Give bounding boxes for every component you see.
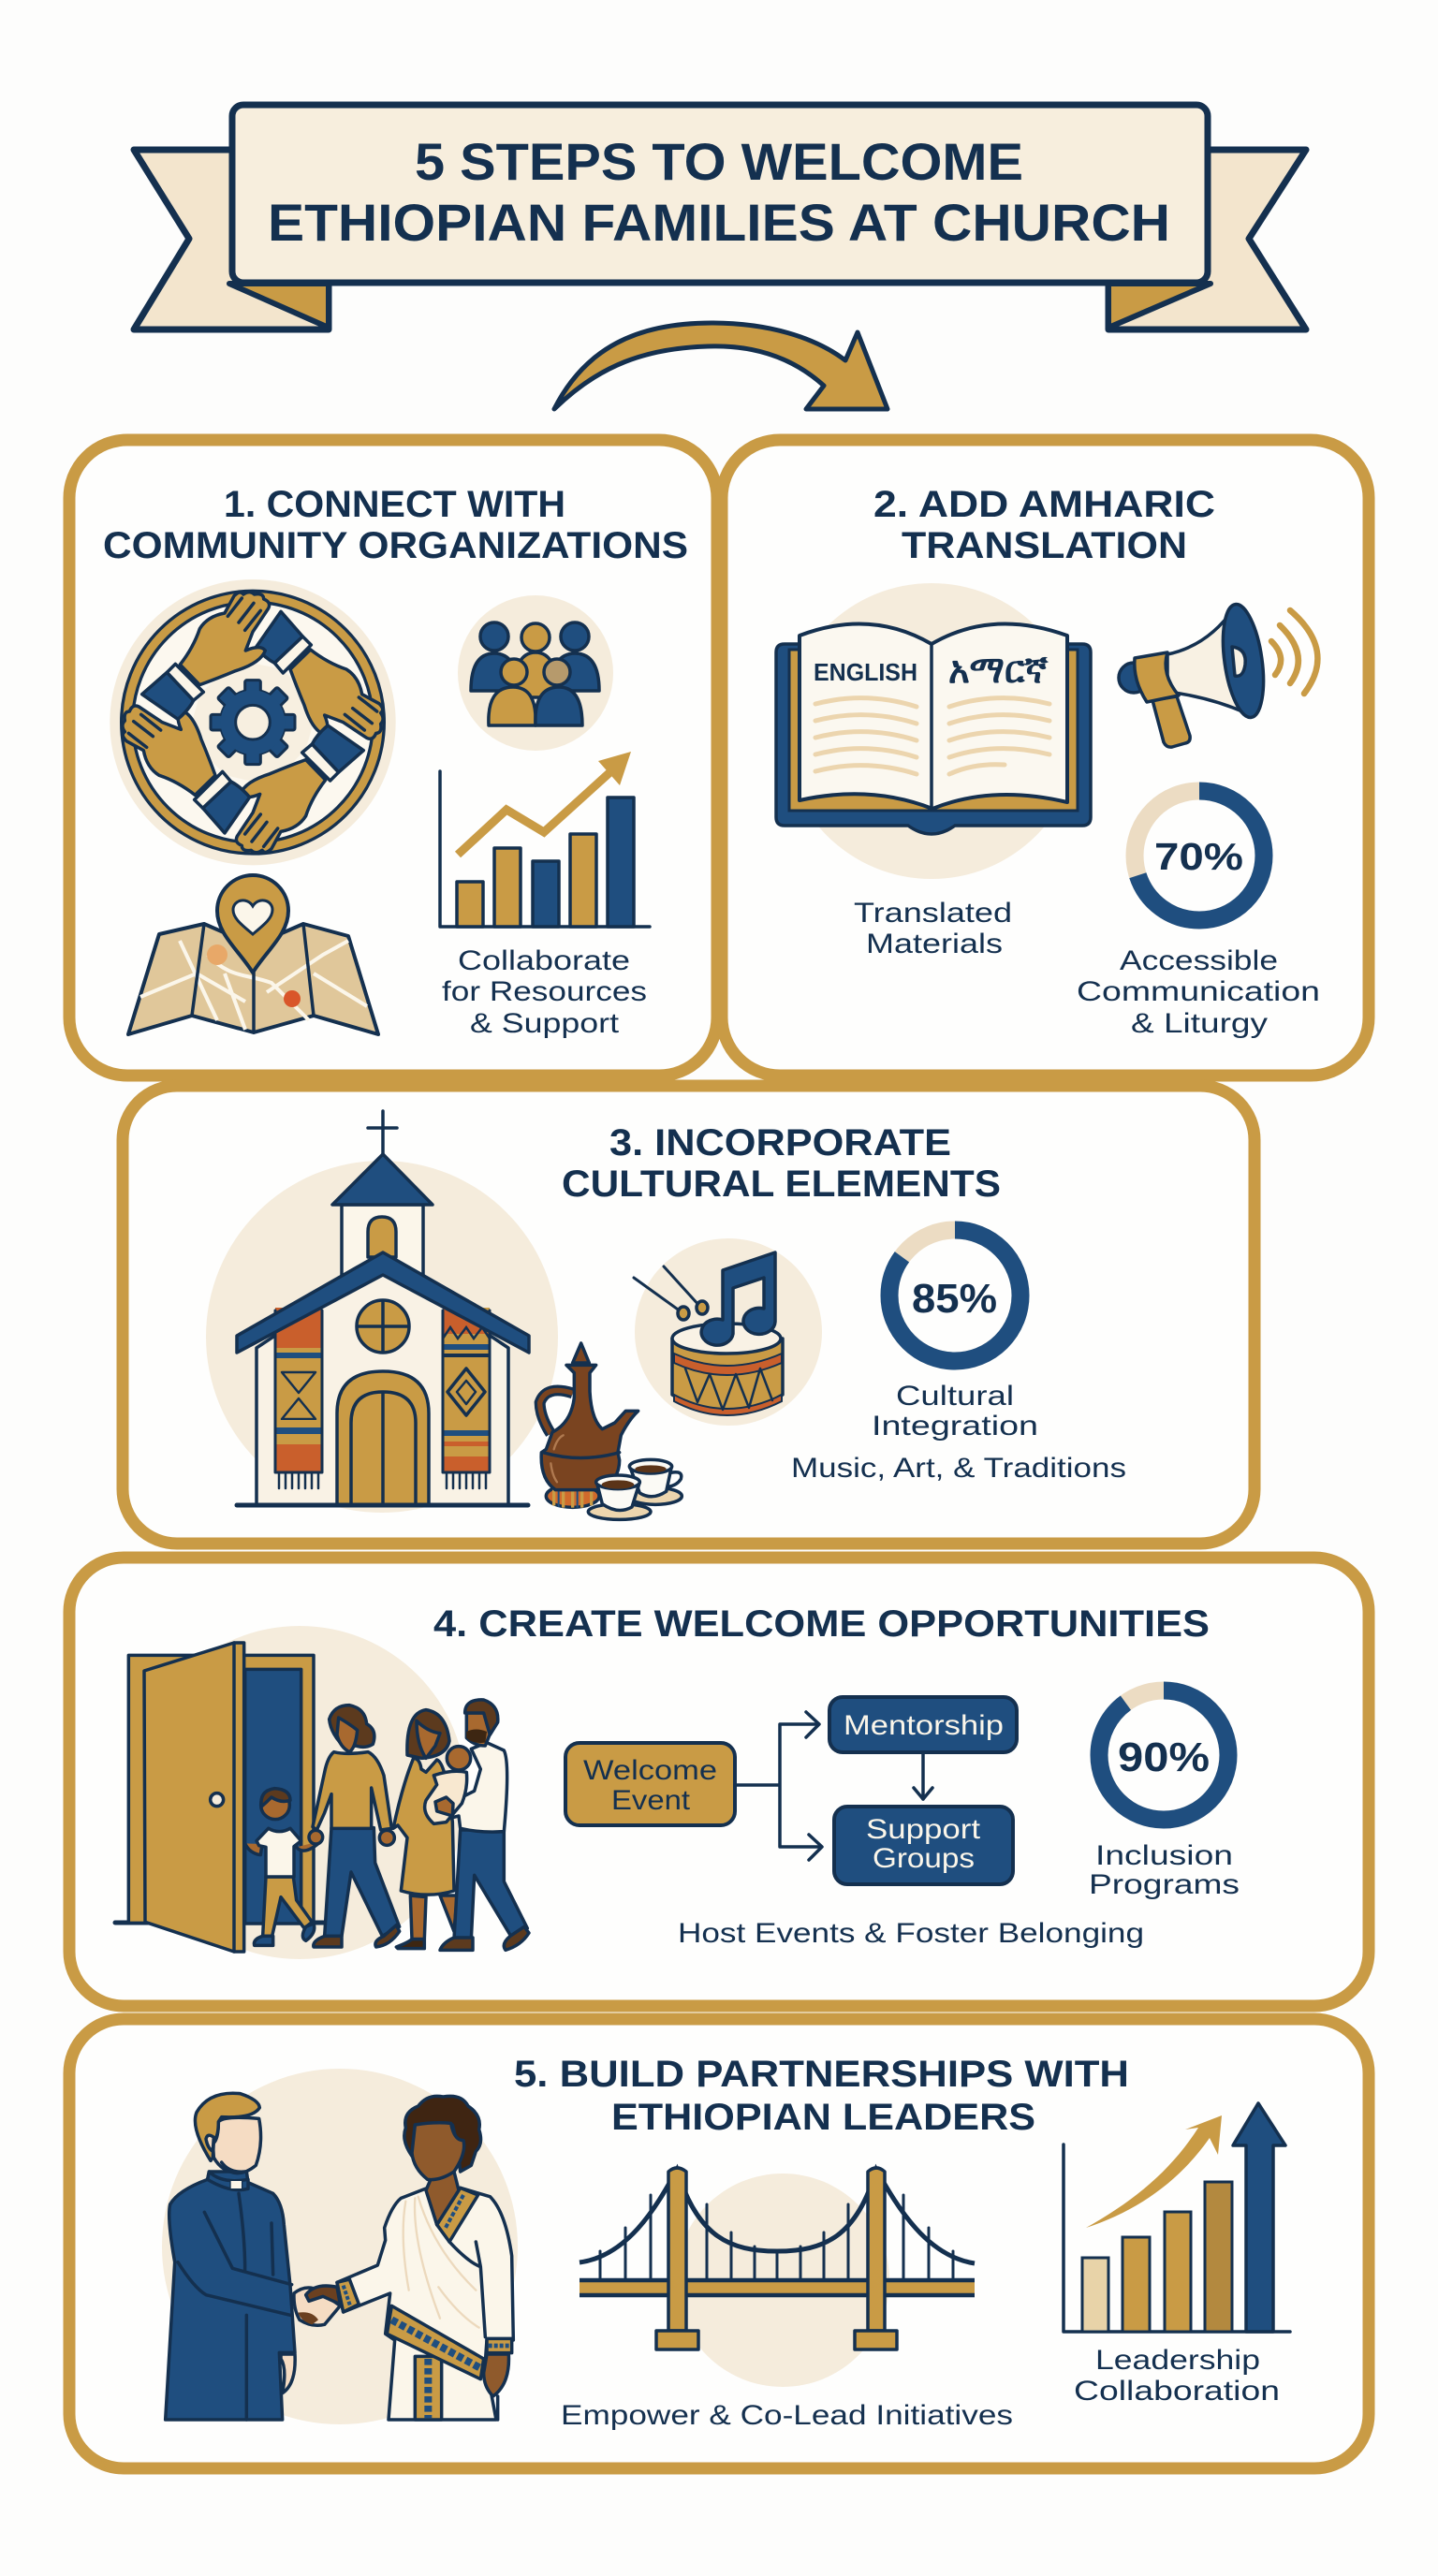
caption: accessible communication: [1077, 945, 1320, 1039]
caption: accessible communication: & Liturgy: [1131, 1008, 1268, 1039]
panel: step 1 connect with community organizations: [69, 440, 717, 1076]
figure: child: [245, 1789, 323, 1945]
icon: group of people: [458, 595, 613, 751]
flow diagram: welcome event to programs: [565, 1697, 1017, 1884]
donut chart: 90%: 90%: [1118, 1734, 1210, 1780]
caption: collaborate: Collaborate: [458, 945, 630, 976]
caption: leadership collaboration: Collaboration: [1074, 2376, 1280, 2407]
caption: accessible communication: Communication: [1077, 976, 1320, 1007]
icon: open bilingual book: ENGLISH: [814, 658, 917, 686]
heading: step 2: [873, 484, 1215, 566]
title text: 5 STEPS TO WELCOME: [415, 132, 1023, 191]
icon: map with heart pin: [128, 875, 378, 1034]
icon: priest and Ethiopian leader handshake: [162, 2069, 518, 2424]
heading: step 1: 1. CONNECT WITH: [224, 484, 565, 525]
caption: leadership collaboration: [1074, 2345, 1280, 2407]
heading: step 2: 2. ADD AMHARIC: [873, 484, 1215, 525]
icon: gear: [211, 681, 295, 765]
donut chart: 90%: [1099, 1690, 1228, 1820]
box: welcome event: Welcome: [583, 1755, 717, 1786]
box: support groups: Support: [866, 1814, 981, 1845]
box: support groups: [834, 1807, 1013, 1884]
caption: collaborate: [442, 945, 647, 1039]
figure: priest: [166, 2093, 295, 2420]
box: welcome event: [565, 1743, 735, 1825]
title text: [268, 132, 1170, 252]
caption: host events: Host Events & Foster Belonging: [678, 1918, 1144, 1949]
caption: inclusion programs: Programs: [1089, 1869, 1240, 1900]
figure: father: [425, 1700, 529, 1950]
heading: step 5: [514, 2054, 1129, 2138]
caption: cultural integration: Music, Art, & Traditions: [791, 1453, 1126, 1484]
caption: leadership collaboration: Leadership: [1095, 2345, 1260, 2376]
panel: step 2 add amharic translation: [722, 440, 1369, 1076]
panel: step 4 create welcome opportunities: [69, 1558, 1369, 2006]
icon: drum with music notes: [634, 1238, 822, 1426]
caption: accessible communication: Accessible: [1120, 945, 1278, 976]
caption: collaborate: for Resources: [442, 976, 647, 1007]
bar chart with arrows: [1064, 2103, 1290, 2332]
icon: suspension bridge: [580, 2168, 975, 2387]
caption: collaborate: & Support: [470, 1008, 620, 1039]
caption: translated materials: Translated: [854, 898, 1012, 929]
banner plate: [232, 105, 1208, 283]
icon: open bilingual book: አማርኛ: [948, 650, 1049, 691]
left ribbon fold: [229, 284, 329, 328]
caption: translated materials: [854, 898, 1012, 959]
heading: step 3: CULTURAL ELEMENTS: [562, 1164, 1001, 1205]
box: support groups: Groups: [873, 1843, 975, 1874]
icon: four hands around gear: [110, 579, 396, 865]
icon: open bilingual book: [776, 583, 1091, 879]
heading: step 3: 3. INCORPORATE: [609, 1122, 951, 1164]
heading: step 4: 4. CREATE WELCOME OPPORTUNITIES: [433, 1603, 1210, 1645]
donut chart: 85%: 85%: [912, 1276, 997, 1322]
donut chart: 70%: 70%: [1154, 835, 1243, 878]
donut chart: 85%: [889, 1230, 1020, 1361]
caption: inclusion programs: Inclusion: [1095, 1840, 1233, 1871]
donut chart: 70%: [1135, 791, 1264, 920]
box: mentorship: Mentorship: [844, 1710, 1004, 1741]
caption: cultural integration: Integration: [872, 1411, 1038, 1442]
heading: step 2: TRANSLATION: [902, 525, 1187, 566]
icon: church with textile banners: [206, 1111, 558, 1513]
caption: empower and co-lead: Empower & Co-Lead Initiatives: [561, 2400, 1013, 2431]
right ribbon fold: [1108, 284, 1211, 328]
panel: step 3 incorporate cultural elements: [123, 1086, 1255, 1544]
heading: step 1: COMMUNITY ORGANIZATIONS: [103, 525, 688, 566]
figure: woman with baby: [393, 1710, 457, 1949]
figure: mother: [313, 1705, 400, 1947]
bar chart with rising arrow: [440, 752, 650, 927]
figure: Ethiopian leader: [337, 2096, 513, 2420]
icon: open door with family: [115, 1626, 529, 1959]
title text: ETHIOPIAN FAMILIES AT CHURCH: [268, 193, 1170, 252]
title banner: [134, 105, 1306, 329]
heading: step 3: [562, 1122, 1001, 1205]
caption: translated materials: Materials: [866, 929, 1003, 959]
heading: step 1: [103, 484, 688, 566]
right ribbon tail: [1108, 150, 1306, 329]
caption: cultural integration: [791, 1381, 1126, 1484]
heading: step 5: 5. BUILD PARTNERSHIPS WITH: [514, 2054, 1129, 2095]
panel: step 5 build partnerships: [69, 2019, 1369, 2468]
box: welcome event: Event: [611, 1785, 691, 1816]
arrow: curved gold arrow: [554, 323, 888, 409]
caption: cultural integration: Cultural: [896, 1381, 1014, 1412]
handshake: [294, 2286, 340, 2325]
box: mentorship: [829, 1697, 1017, 1752]
icon: megaphone: [1119, 602, 1317, 747]
left ribbon tail: [134, 150, 329, 329]
heading: step 5: ETHIOPIAN LEADERS: [611, 2097, 1035, 2138]
icon: jebena coffee pot and cups: [540, 1343, 682, 1519]
caption: inclusion programs: [1089, 1840, 1240, 1900]
